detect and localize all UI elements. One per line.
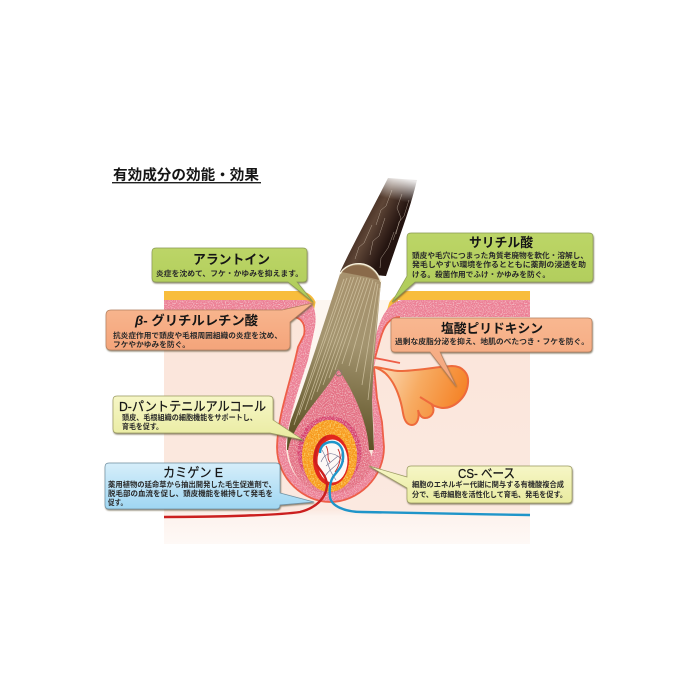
illustration: sebaceous gland [374,366,468,425]
callout: β-グリチルレチン酸: フケやかゆみを防ぐ。 [113,339,190,349]
stratum corneum yellow band [164,291,530,322]
callout: CS-ベース: 分で、毛母細胞を活性化して育毛、発毛を促す。 [412,489,567,499]
illustration: blue vein [320,442,530,515]
red duct outline [375,317,400,363]
hair dark shaft [340,178,417,276]
orange matrix ring [302,420,357,492]
illustration: red artery [164,437,327,517]
callout: 塩酸ピリドキシン: 塩酸ピリドキシン [441,321,543,336]
callout: カミゲンE [105,463,314,509]
callout: カミゲンE: 脱毛部の血流を促し、頭皮機能を維持して発毛を [108,488,273,498]
callout: カミゲンE: 薬用植物の延命草から抽出開発した毛生促進剤で、 [108,479,276,489]
callout: β-グリチルレチン酸 [106,303,313,350]
callout: D-パントテニルアルコール [113,396,303,440]
red follicle outline [277,317,384,502]
callout: カミゲンE: カミゲン E [163,465,223,480]
callout: サリチル酸 [392,233,593,302]
follicle cavity [286,300,390,490]
callout: アラントイン [152,248,313,302]
callout: β-グリチルレチン酸: β- グリチルレチン酸 [134,313,258,328]
callout: サリチル酸: サリチル酸 [469,235,533,250]
callout: D-パントテニルアルコール: 頭皮、毛根組織の細胞機能をサポートし、 [122,412,257,422]
callout: アラントイン: 炎症を沈めて、フケ・かゆみを抑えます。 [156,268,303,278]
callout: D-パントテニルアルコール: 育毛を促す。 [122,421,163,431]
callout: アラントイン: アラントイン [193,252,270,267]
illustration: hair follicle [164,176,530,502]
callout: サリチル酸: 発毛しやすい環境を作るとともに薬剤の浸透を助 [412,259,586,269]
red inner ring [313,434,349,486]
callout: サリチル酸: 頭皮や毛穴につまった角質老廃物を軟化・溶解し、 [412,250,588,260]
title: 有効成分の効能・効果 [113,166,260,184]
hair root cream rim [340,264,381,282]
callout: D-パントテニルアルコール: D-パントテニルアルコール [119,399,266,414]
callout: CS-ベース: CS- ベース [458,466,515,481]
magenta cell ring [298,416,362,488]
callout: CS-ベース [369,466,572,503]
dermal papilla [288,369,372,494]
white papilla centre [318,440,348,482]
epidermis and follicle wall [164,300,530,502]
callout: β-グリチルレチン酸: 抗炎症作用で頭皮や毛根周囲組織の炎症を沈め、 [113,330,282,340]
callout: 塩酸ピリドキシン: 過剰な皮脂分泌を抑え、地肌のべたつき・フケを防ぐ。 [395,336,589,346]
callout: サリチル酸: ける。殺菌作用でふけ・かゆみを防ぐ。 [412,269,550,279]
callout: 塩酸ピリドキシン [391,318,592,386]
dermis background [164,316,530,544]
callout: CS-ベース: 細胞のエネルギー代謝に関与する有機酸複合成 [412,479,564,489]
hair root tan interior [287,264,381,450]
hair top fade [374,176,420,202]
panel: skin cross-section [164,291,530,544]
callout: カミゲンE: 促す。 [108,497,127,507]
